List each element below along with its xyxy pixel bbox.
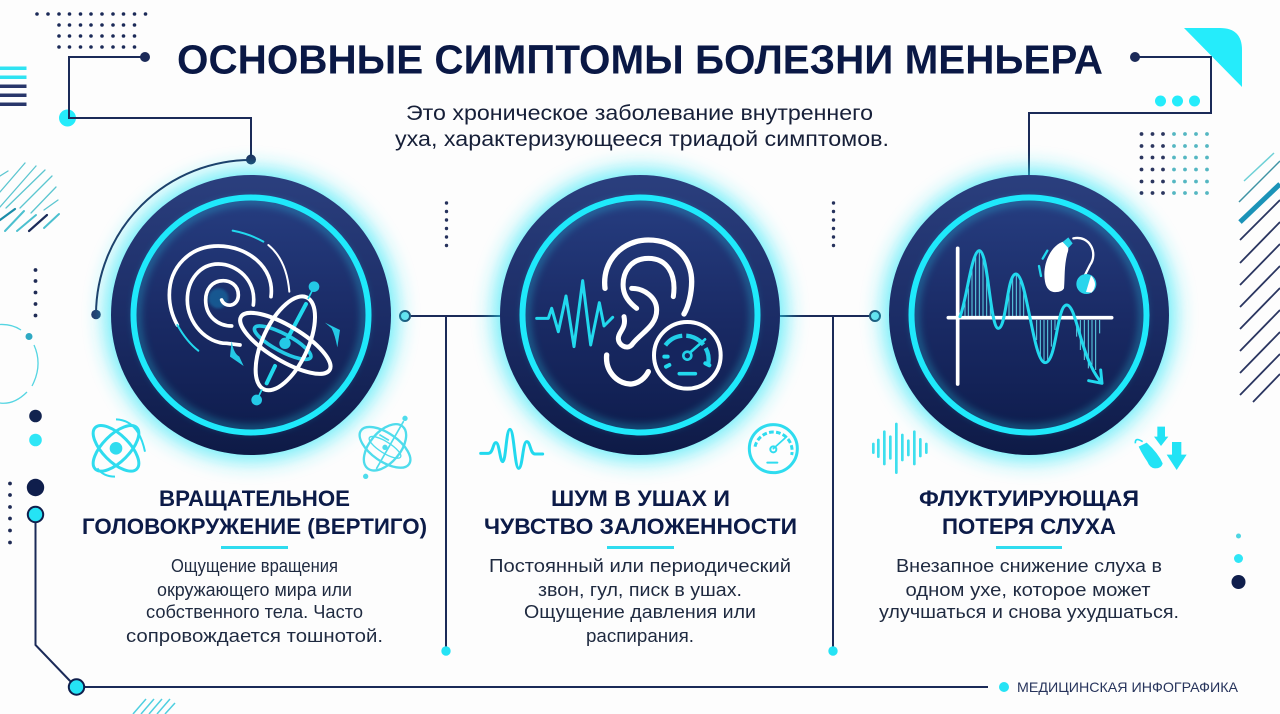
body: hearing loss: Внезапное снижение слуха в xyxy=(896,556,1162,576)
icon: fluctuating chart and hearing aid xyxy=(948,237,1112,384)
column: tinnitus text xyxy=(484,486,797,646)
heading: hearing loss xyxy=(919,486,1139,539)
body: vertigo: Ощущение вращения xyxy=(171,556,338,576)
decorative cyan corner xyxy=(1184,28,1242,87)
connectors: middle horizontal and vertical xyxy=(400,311,880,656)
subtitle: уха, характеризующееся триадой симптомов. xyxy=(395,128,889,151)
body: hearing loss: одном ухе, которое может xyxy=(906,580,1150,600)
body: hearing loss xyxy=(879,556,1179,622)
icon: small gyroscope xyxy=(353,416,417,479)
decorative dot grid top left xyxy=(35,12,147,49)
body: vertigo: окружающего мира или xyxy=(157,580,352,600)
icon: small sound wave xyxy=(481,429,543,468)
column: hearing loss text xyxy=(879,486,1179,622)
panel: tinnitus circle xyxy=(494,169,786,461)
footer label: МЕДИЦИНСКАЯ ИНФОГРАФИКА xyxy=(1017,679,1239,695)
underline xyxy=(996,546,1062,549)
body: vertigo xyxy=(126,556,383,646)
connector: top left to vertigo circle xyxy=(59,52,256,319)
heading: vertigo: ВРАЩАТЕЛЬНОЕ xyxy=(159,486,350,511)
body: tinnitus: Ощущение давления или xyxy=(524,602,756,622)
body: tinnitus xyxy=(489,556,791,646)
subtitle: Это хроническое заболевание внутреннего xyxy=(406,102,873,125)
decorative dots left xyxy=(8,268,44,544)
three cyan dots xyxy=(1155,96,1200,106)
underline xyxy=(221,546,288,549)
column: vertigo text xyxy=(82,486,427,646)
connector: bottom footer line xyxy=(28,507,988,695)
body: vertigo: сопровождается тошнотой. xyxy=(126,626,383,646)
body: tinnitus: распирания. xyxy=(586,626,694,646)
decorative hatch bottom xyxy=(133,699,175,714)
body: hearing loss: улучшаться и снова ухудшаться. xyxy=(879,602,1179,622)
icon: small gauge xyxy=(749,425,797,473)
decorative stripes left xyxy=(0,66,26,106)
decorative dot grid top right xyxy=(1140,132,1209,195)
heading: vertigo: ГОЛОВОКРУЖЕНИЕ (ВЕРТИГО) xyxy=(82,514,427,539)
underline xyxy=(607,546,674,549)
heading: tinnitus xyxy=(484,486,797,539)
body: tinnitus: Постоянный или периодический xyxy=(489,556,791,576)
icon: small hearing aid with arrows xyxy=(1135,427,1187,470)
heading: tinnitus: ШУМ В УШАХ И xyxy=(551,486,730,511)
decorative dots right xyxy=(1232,534,1246,589)
heading: hearing loss: ФЛУКТУИРУЮЩАЯ xyxy=(919,486,1139,511)
icon: ear with wave and gauge xyxy=(537,240,721,389)
connector: top right to hearing circle xyxy=(1029,52,1211,180)
body: tinnitus: звон, гул, писк в ушах. xyxy=(538,580,742,600)
heading: hearing loss: ПОТЕРЯ СЛУХА xyxy=(942,514,1116,539)
icon: small sound bars xyxy=(873,424,926,473)
icon: spiral and gyroscope xyxy=(169,231,340,405)
dotted verticals xyxy=(445,201,835,247)
panel: vertigo circle xyxy=(105,169,397,461)
decorative arc left xyxy=(0,324,38,403)
heading: tinnitus: ЧУВСТВО ЗАЛОЖЕННОСТИ xyxy=(484,514,797,539)
subtitle xyxy=(395,102,889,151)
body: vertigo: собственного тела. Часто xyxy=(146,602,363,622)
heading: vertigo xyxy=(82,486,427,539)
title: ОСНОВНЫЕ СИМПТОМЫ БОЛЕЗНИ МЕНЬЕРА xyxy=(177,36,1103,82)
decorative diagonal stripes right xyxy=(1239,153,1280,402)
decorative hatched circle xyxy=(0,163,59,231)
panel: hearing loss circle xyxy=(883,169,1175,461)
icon: small atom xyxy=(86,418,146,479)
